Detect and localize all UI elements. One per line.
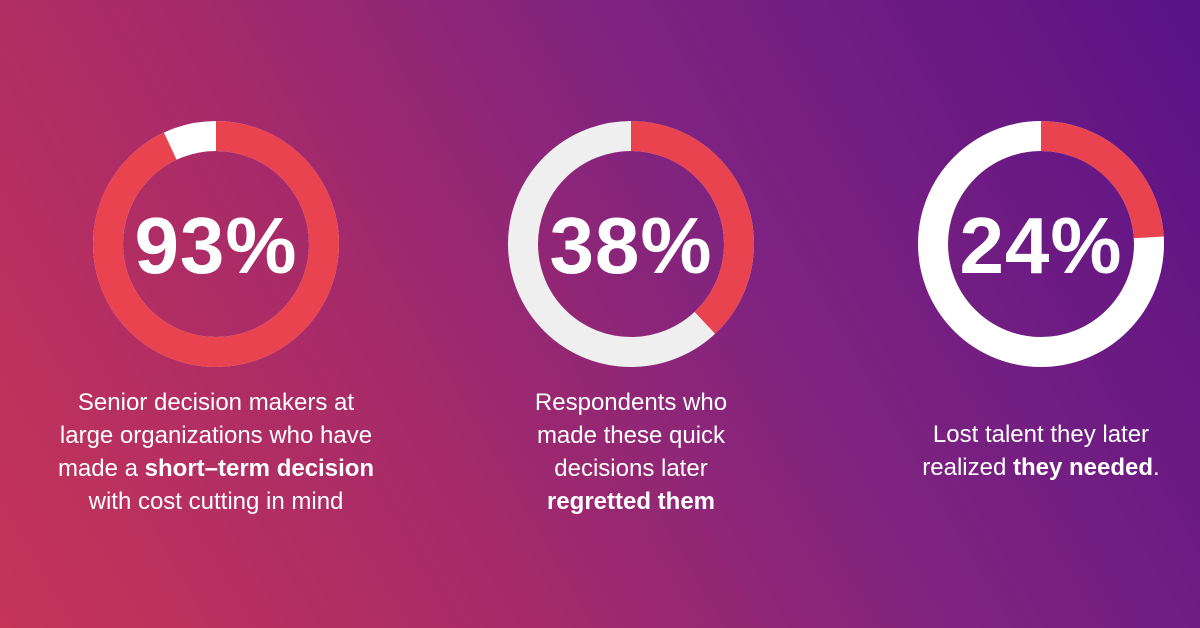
caption: 38%	[535, 389, 727, 515]
caption: 38%: regretted them	[547, 488, 715, 515]
caption: 38%: made these quick	[537, 422, 725, 449]
caption: 24%	[922, 421, 1160, 481]
stat: 38%: 38%	[549, 201, 713, 290]
caption: 93%: large organizations who have	[60, 422, 372, 449]
stat: 93%: 93%	[134, 201, 298, 290]
chart: donut 24%	[918, 121, 1164, 367]
chart: donut 38%	[508, 121, 754, 367]
stat: 24%: 24%	[959, 201, 1123, 290]
caption: 38%: decisions later	[554, 455, 708, 482]
caption: 24%: Lost talent they later	[933, 421, 1149, 448]
caption: 93%: Senior decision makers at	[78, 389, 354, 416]
caption: 93%	[58, 389, 374, 515]
chart: donut 93%	[93, 121, 339, 367]
caption: 93%: with cost cutting in mind	[89, 488, 343, 515]
caption: 24%: realized they needed.	[922, 454, 1160, 481]
caption: 93%: made a short–term decision	[58, 455, 374, 482]
caption: 38%: Respondents who	[535, 389, 727, 416]
